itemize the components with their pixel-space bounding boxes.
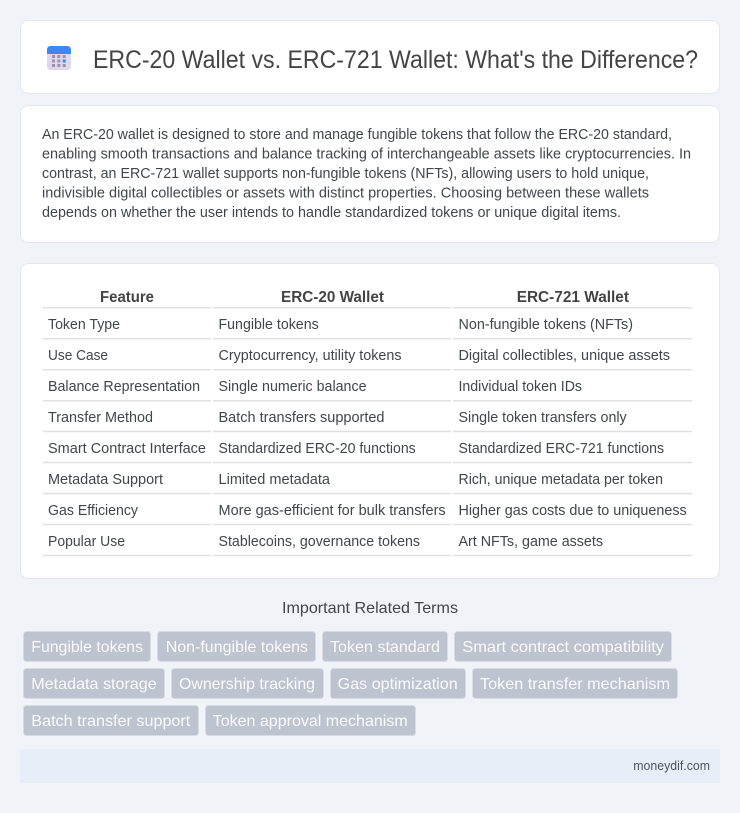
table header row — [100, 289, 630, 306]
text block: description: An ERC-20 wallet is designed to store and manage fungible tokens that follow the ERC-20 standard, — [42, 127, 672, 143]
panel: title header — [20, 20, 720, 94]
tag: metadata storage: Metadata storage — [31, 676, 157, 693]
row: smart contract interface — [48, 441, 664, 457]
row: use case: Use Case — [48, 348, 108, 364]
panel: comparison table — [20, 264, 720, 578]
text block: description: indivisible digital collectibles or assets with distinct properties. Choosing between these wallets — [42, 186, 649, 202]
text block: description — [42, 127, 691, 221]
row: popular use: Popular Use — [48, 534, 125, 550]
title: ERC-20 Wallet vs. ERC-721 Wallet: What's the Difference? — [93, 46, 698, 74]
row: popular use: Stablecoins, governance tokens — [218, 534, 420, 550]
tag: token approval mechanism — [206, 706, 416, 736]
row: popular use: Art NFTs, game assets — [458, 534, 603, 550]
text block: description: enabling smooth transactions and balance tracking of interchangeable assets like cryptocurrencies. In — [42, 146, 691, 162]
tag: token transfer mechanism: Token transfer mechanism — [480, 676, 670, 693]
row: balance representation: Balance Representation — [48, 379, 200, 395]
footer source: moneydif.com — [633, 759, 710, 773]
tag: token standard — [322, 632, 448, 662]
row: token type — [48, 317, 633, 333]
tag: ownership tracking — [172, 668, 324, 698]
row: gas efficiency: Gas Efficiency — [48, 503, 139, 519]
tag: metadata storage — [24, 668, 164, 698]
row: popular use — [48, 534, 603, 550]
text block: description: contrast, an ERC-721 wallet supports non-fungible tokens (NFTs), allowing users to hold unique, — [42, 166, 649, 182]
heading: related terms: Important Related Terms — [282, 600, 458, 617]
tag: non-fungible tokens — [158, 632, 316, 662]
table header row: ERC-20 Wallet — [281, 289, 385, 306]
tag: token standard: Token standard — [330, 639, 440, 656]
tag: gas optimization: Gas optimization — [338, 676, 458, 693]
row: token type: Non-fungible tokens (NFTs) — [458, 317, 633, 333]
row: gas efficiency: Higher gas costs due to uniqueness — [458, 503, 687, 519]
row: transfer method: Transfer Method — [48, 410, 153, 426]
row: metadata support: Limited metadata — [218, 472, 331, 488]
tag: token approval mechanism: Token approval mechanism — [213, 713, 408, 730]
tag: ownership tracking: Ownership tracking — [179, 676, 315, 693]
row: smart contract interface: Smart Contract Interface — [48, 441, 206, 457]
panel: intro paragraph — [20, 106, 720, 242]
row: smart contract interface: Standardized ERC-20 functions — [218, 441, 416, 457]
tag: batch transfer support: Batch transfer support — [31, 713, 191, 730]
related term tags — [24, 632, 678, 736]
row: metadata support: Metadata Support — [48, 472, 163, 488]
table header row: ERC-721 Wallet — [517, 289, 630, 306]
row: gas efficiency — [48, 503, 687, 519]
row: metadata support — [48, 472, 663, 488]
row: token type: Token Type — [48, 317, 120, 333]
row: token type: Fungible tokens — [218, 317, 319, 333]
tag: smart contract compatibility — [454, 632, 672, 662]
tag: token transfer mechanism — [472, 668, 678, 698]
row: transfer method — [48, 410, 627, 426]
tag: gas optimization — [330, 668, 466, 698]
text block: description: depends on whether the user intends to handle standardized tokens or unique digital items. — [42, 205, 621, 221]
row: use case: Digital collectibles, unique assets — [458, 348, 670, 364]
tag: batch transfer support — [24, 706, 198, 736]
row: balance representation: Individual token IDs — [458, 379, 582, 395]
tag: fungible tokens: Fungible tokens — [31, 639, 143, 656]
table header row: Feature — [100, 289, 154, 306]
row: balance representation: Single numeric balance — [218, 379, 366, 395]
row: transfer method: Batch transfers supported — [218, 410, 384, 426]
tag: non-fungible tokens: Non-fungible tokens — [166, 639, 308, 656]
row: transfer method: Single token transfers only — [458, 410, 627, 426]
row: use case — [48, 348, 670, 364]
row: gas efficiency: More gas-efficient for bulk transfers — [218, 503, 446, 519]
tag: smart contract compatibility: Smart contract compatibility — [462, 639, 664, 656]
row: balance representation — [48, 379, 582, 395]
footer bar — [20, 749, 720, 783]
row: metadata support: Rich, unique metadata per token — [458, 472, 663, 488]
tag: fungible tokens — [24, 632, 150, 662]
row: use case: Cryptocurrency, utility tokens — [218, 348, 402, 364]
icon: calendar — [47, 46, 71, 70]
row: smart contract interface: Standardized ERC-721 functions — [458, 441, 664, 457]
